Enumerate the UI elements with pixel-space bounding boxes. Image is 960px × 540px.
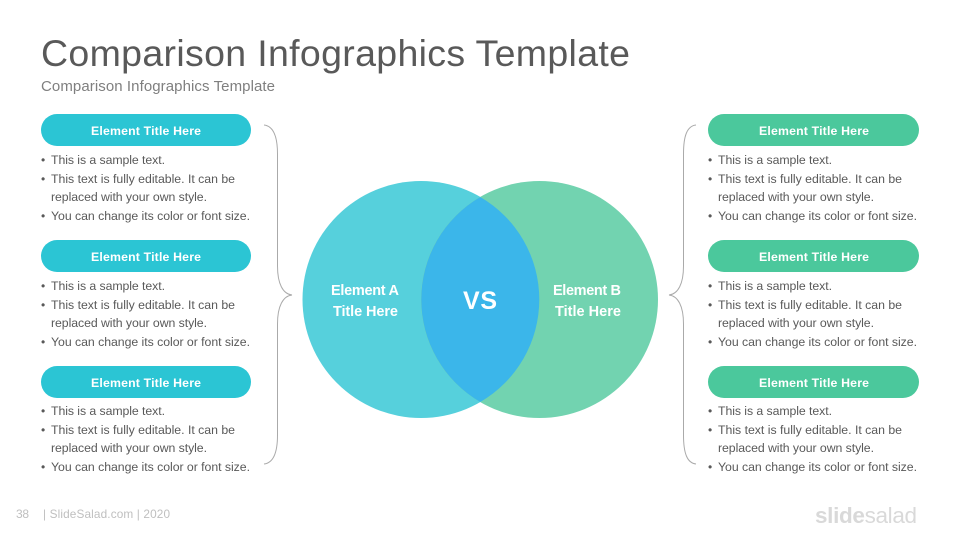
right item 3: [708, 366, 919, 474]
right item 2: [708, 240, 919, 349]
overlap: [421, 197, 539, 402]
bullet list: •: [41, 153, 45, 167]
bullet list: replaced with your own style.: [51, 316, 207, 330]
pill heading: Element Title Here: [759, 250, 869, 264]
subtitle: Comparison Infographics Template: [41, 78, 275, 95]
bullet list: •: [41, 404, 45, 418]
pill heading: [708, 240, 919, 272]
bullet list: This is a sample text.: [51, 279, 165, 293]
bullet list: •: [41, 460, 45, 474]
bullet list: You can change its color or font size.: [718, 209, 917, 223]
left item 1: [41, 114, 251, 223]
circle: element A: [302, 181, 540, 418]
bullet list: replaced with your own style.: [718, 316, 874, 330]
bullet list: [41, 153, 250, 223]
label: element A: [331, 283, 400, 320]
bullet list: replaced with your own style.: [718, 441, 874, 455]
venn diagram: [302, 181, 658, 418]
bullet list: This text is fully editable. It can be: [718, 172, 902, 186]
logo: slidesalad: [815, 503, 917, 528]
label: VS: VS: [463, 287, 497, 315]
bullet list: replaced with your own style.: [51, 441, 207, 455]
label: element B: Title Here: [555, 304, 621, 320]
bullet list: •: [708, 460, 712, 474]
label: element B: [553, 283, 621, 320]
pill heading: [708, 114, 919, 146]
bullet list: [708, 404, 917, 474]
right item 1: [708, 114, 919, 223]
left brace: [264, 125, 292, 464]
title: Comparison Infographics Template: [41, 32, 630, 74]
bullet list: •: [708, 172, 712, 186]
left item 3: [41, 366, 251, 474]
panel: left items: [41, 114, 251, 474]
bullet list: •: [708, 423, 712, 437]
bullet list: This text is fully editable. It can be: [51, 423, 235, 437]
right brace: [669, 125, 696, 464]
bullet list: [41, 279, 250, 349]
footer: source: | SlideSalad.com | 2020: [43, 507, 170, 521]
bullet list: •: [41, 279, 45, 293]
bullet list: [41, 404, 250, 474]
pill heading: Element Title Here: [91, 376, 201, 390]
footer: page number: 38: [16, 507, 29, 521]
pill heading: [41, 366, 251, 398]
bullet list: This is a sample text.: [51, 153, 165, 167]
pill heading: Element Title Here: [91, 124, 201, 138]
bullet list: This is a sample text.: [718, 279, 832, 293]
pill heading: [41, 114, 251, 146]
bullet list: You can change its color or font size.: [718, 335, 917, 349]
left item 2: [41, 240, 251, 349]
bullet list: This is a sample text.: [718, 153, 832, 167]
bullet list: •: [41, 172, 45, 186]
bullet list: •: [708, 279, 712, 293]
bullet list: This text is fully editable. It can be: [718, 423, 902, 437]
bullet list: [708, 153, 917, 223]
bullet list: [708, 279, 917, 349]
pill heading: Element Title Here: [91, 250, 201, 264]
bullet list: This text is fully editable. It can be: [51, 298, 235, 312]
bullet list: replaced with your own style.: [51, 190, 207, 204]
bullet list: This is a sample text.: [718, 404, 832, 418]
bullet list: You can change its color or font size.: [51, 335, 250, 349]
bullet list: This text is fully editable. It can be: [51, 172, 235, 186]
bullet list: •: [708, 209, 712, 223]
bullet list: This is a sample text.: [51, 404, 165, 418]
bullet list: You can change its color or font size.: [51, 209, 250, 223]
circle: element B: [421, 181, 658, 418]
bullet list: You can change its color or font size.: [51, 460, 250, 474]
pill heading: [708, 366, 919, 398]
bullet list: This text is fully editable. It can be: [718, 298, 902, 312]
bullet list: •: [708, 335, 712, 349]
bullet list: •: [708, 153, 712, 167]
bullet list: You can change its color or font size.: [718, 460, 917, 474]
pill heading: [41, 240, 251, 272]
bullet list: •: [708, 298, 712, 312]
panel: right items: [708, 114, 919, 474]
bullet list: •: [41, 423, 45, 437]
bullet list: •: [41, 209, 45, 223]
label: element B: Element B: [553, 283, 621, 299]
label: element A: Element A: [331, 283, 400, 299]
label: element A: Title Here: [333, 304, 398, 320]
pill heading: Element Title Here: [759, 124, 869, 138]
bullet list: •: [41, 335, 45, 349]
bullet list: replaced with your own style.: [718, 190, 874, 204]
bullet list: •: [708, 404, 712, 418]
pill heading: Element Title Here: [759, 376, 869, 390]
bullet list: •: [41, 298, 45, 312]
